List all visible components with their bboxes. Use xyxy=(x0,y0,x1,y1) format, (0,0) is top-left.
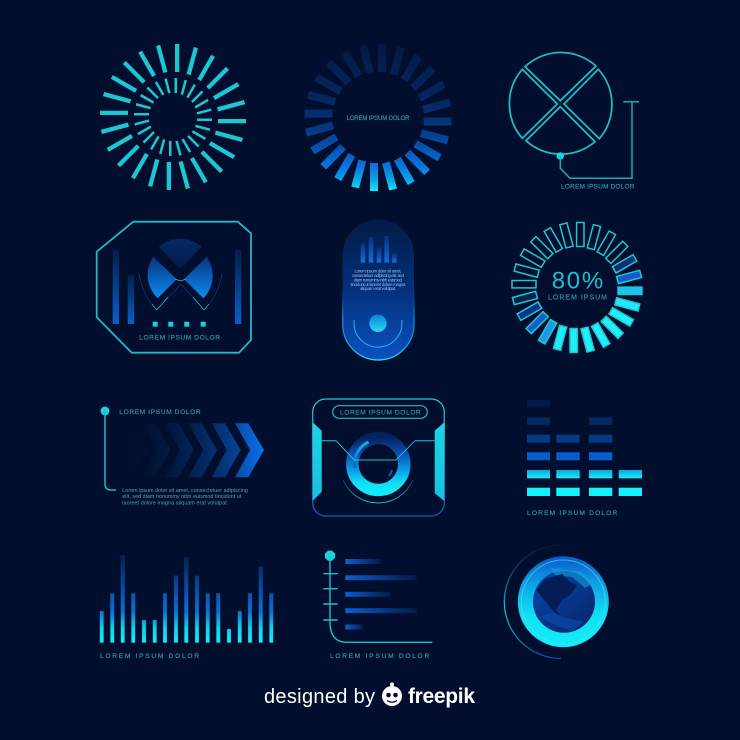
description text: Lorem ipsum dolor sit amet, consectetuer adipiscing xyxy=(122,488,248,494)
panel: octagon frame with pie cross xyxy=(97,222,251,353)
title pill xyxy=(333,406,427,418)
capsule text: consectetuer adipiscing elit, sed xyxy=(352,273,405,278)
side bars xyxy=(113,250,241,324)
connector line xyxy=(322,441,435,460)
lens arcs xyxy=(355,442,368,468)
label: LOREM IPSUM DOLOR xyxy=(100,653,199,660)
pie sectors xyxy=(159,239,202,269)
description text xyxy=(122,488,248,506)
outer thin arc xyxy=(343,480,413,503)
capsule text: aliquam erat volutpat. xyxy=(360,286,396,291)
inner ring of ticks xyxy=(134,78,212,156)
connector dot xyxy=(557,152,564,160)
label: LOREM IPSUM DOLOR xyxy=(139,334,220,342)
mini bars xyxy=(361,236,397,263)
capsule text: diam nonummy nibh euismod xyxy=(354,278,403,282)
description text: laoreet dolore magna aliquam erat volutpat. xyxy=(122,500,228,506)
freepik wordmark: freepik xyxy=(408,685,475,708)
marker dot xyxy=(325,551,335,561)
capsule text: Lorem ipsum dolor sit amet, xyxy=(354,268,402,274)
connector line xyxy=(560,102,639,178)
gauge label: LOREM IPSUM xyxy=(548,294,607,302)
capsule text xyxy=(350,268,406,291)
indicator squares xyxy=(153,322,206,327)
panel: sunburst radial dial xyxy=(100,44,246,190)
panel: framed lens xyxy=(313,399,444,516)
bars xyxy=(345,559,417,630)
percentage value: 80% xyxy=(552,268,603,294)
marker dot xyxy=(100,406,110,416)
bars xyxy=(100,556,273,643)
panel: blue capsule xyxy=(343,219,414,360)
label: LOREM IPSUM DOLOR xyxy=(561,183,635,190)
panel: globe lens xyxy=(504,545,609,658)
ring segments xyxy=(304,44,452,191)
side blocks xyxy=(313,422,322,501)
panel: outlined circle with cross xyxy=(509,53,639,190)
icon: freepik mascot xyxy=(382,682,402,706)
outer ring of ticks xyxy=(100,44,246,190)
connector line xyxy=(105,411,116,490)
globe xyxy=(533,571,595,633)
panel: stacked level meter xyxy=(527,400,642,517)
description text: elit, sed diam nonummy nibh euismod tincidunt ut xyxy=(122,494,242,500)
panel: 80 percent gauge xyxy=(512,222,642,352)
designed by: designed by xyxy=(264,686,375,708)
knob xyxy=(369,315,387,332)
octagon frame xyxy=(97,222,251,353)
axis xyxy=(323,556,432,642)
circle sectors xyxy=(509,53,612,154)
column 3 xyxy=(589,417,612,496)
column 2 xyxy=(556,435,580,496)
rounded frame xyxy=(313,399,444,516)
column 4 xyxy=(619,470,642,496)
title label: LOREM IPSUM DOLOR xyxy=(340,409,421,416)
capsule body xyxy=(343,219,414,360)
panel: blue gradient loading ring xyxy=(304,44,452,191)
panel: equalizer bar chart xyxy=(100,556,273,660)
thin outline xyxy=(139,273,222,310)
panel: chevron process arrow xyxy=(100,406,264,506)
lower globe shade xyxy=(540,612,584,631)
ring label: LOREM IPSUM DOLOR xyxy=(346,116,410,122)
panel: horizontal bar chart xyxy=(323,551,432,660)
continent xyxy=(536,574,577,617)
glow ring xyxy=(518,556,609,647)
capsule text: tincidunt ut laoreet dolore magna xyxy=(350,282,406,287)
footer brand xyxy=(264,682,475,708)
gauge segments xyxy=(512,222,642,352)
thin ring xyxy=(521,560,605,644)
heading: LOREM IPSUM DOLOR xyxy=(119,409,201,416)
chevrons xyxy=(118,423,264,477)
outer arc xyxy=(504,545,561,658)
knob arc xyxy=(354,320,402,347)
highlights xyxy=(551,568,592,588)
column 1 xyxy=(527,400,550,496)
label: LOREM IPSUM DOLOR xyxy=(330,653,430,660)
label: LOREM IPSUM DOLOR xyxy=(527,510,618,517)
lens ring xyxy=(352,438,404,490)
